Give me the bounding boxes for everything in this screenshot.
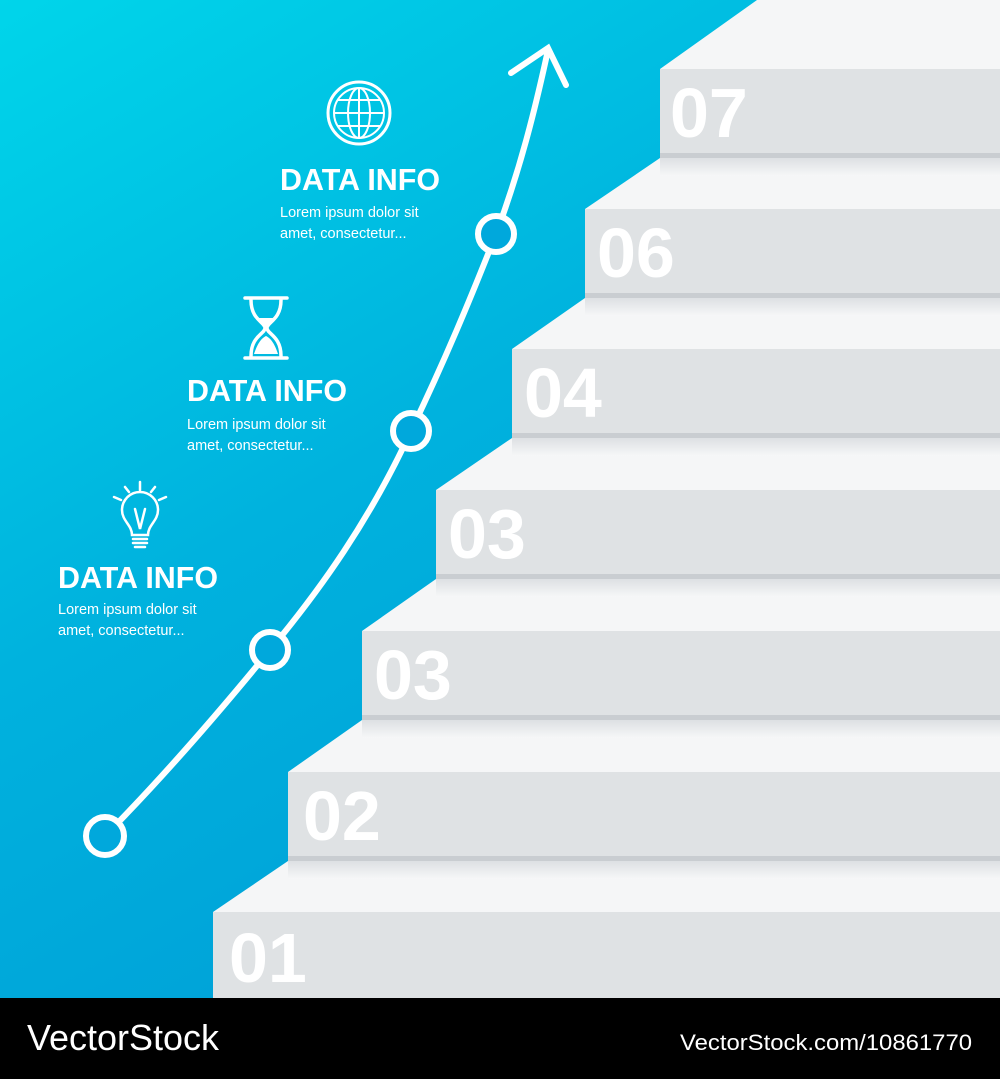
step 03 lower: 03 — [374, 636, 452, 714]
step 06: 06 — [597, 214, 675, 292]
footer: VectorStock — [27, 1017, 220, 1058]
step 02: 02 — [303, 777, 381, 855]
text block 1: DATA INFO — [58, 560, 218, 595]
step 07 — [660, 69, 1000, 176]
text block 3: DATA INFO — [280, 162, 440, 197]
step 03 upper: 03 — [448, 495, 526, 573]
text block 3: Lorem ipsum dolor sit — [280, 205, 419, 221]
step 01: 01 — [229, 919, 307, 997]
text block 1: amet, consectetur... — [58, 623, 185, 639]
text block 3: amet, consectetur... — [280, 226, 407, 242]
text block 3 — [280, 162, 440, 242]
text block 2: amet, consectetur... — [187, 438, 314, 454]
icon: hourglass — [245, 298, 287, 358]
step 07: 07 — [670, 74, 748, 152]
text block 2: DATA INFO — [187, 373, 347, 408]
icon: light bulb — [114, 482, 166, 547]
step 02 — [288, 772, 1000, 879]
text block 2 — [187, 373, 347, 454]
text block 2: Lorem ipsum dolor sit — [187, 417, 326, 433]
icon: globe — [328, 82, 390, 144]
step 01 — [213, 912, 1000, 998]
step 03 lower — [362, 631, 1000, 738]
footer: VectorStock.com/10861770 — [680, 1030, 972, 1055]
step 03 upper — [436, 490, 1000, 597]
staircase — [213, 0, 1000, 998]
step 06 — [585, 209, 1000, 316]
step 04: 04 — [524, 354, 602, 432]
milestone circles — [86, 216, 514, 855]
growth curve arrow — [86, 48, 566, 855]
step 04 — [512, 349, 1000, 456]
footer — [0, 998, 1000, 1079]
text block 1: Lorem ipsum dolor sit — [58, 602, 197, 618]
text block 1 — [58, 560, 218, 639]
